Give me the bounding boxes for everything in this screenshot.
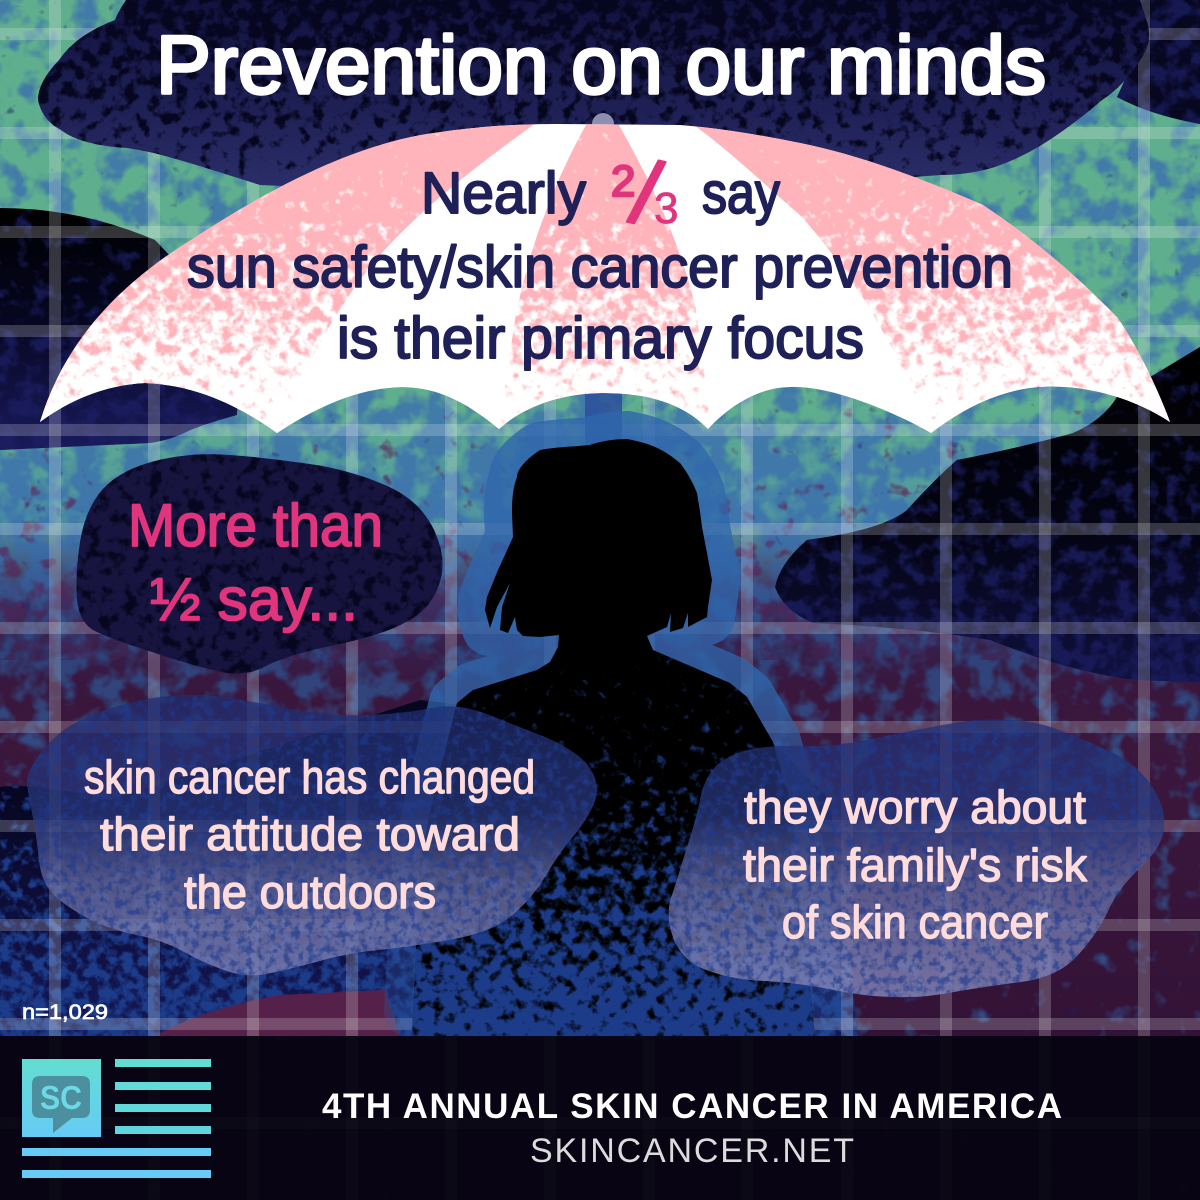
text block: attitude: skin cancer has changed xyxy=(84,751,535,803)
text block: umbrella headline xyxy=(187,161,1013,371)
text block: family worry xyxy=(743,781,1088,948)
icon: umbrella tip xyxy=(592,113,614,135)
text block: umbrella headline: Nearly xyxy=(421,161,586,226)
callout: two-thirds fraction xyxy=(611,142,678,245)
text block: umbrella headline: sun safety/skin cancer prevention xyxy=(187,235,1013,300)
background: dark speckled hill xyxy=(0,690,880,1040)
text block: more than half: ½ say... xyxy=(150,566,358,633)
icon: umbrella pole xyxy=(585,385,622,455)
panel: family worry cloud xyxy=(660,710,1175,1005)
panel: umbrella canopy xyxy=(40,124,1170,433)
panel: more than half cloud xyxy=(76,454,442,674)
text block: more than half: More than xyxy=(128,492,383,559)
icon: person silhouette xyxy=(400,439,830,1040)
footer website: SKINCANCER.NET xyxy=(530,1132,854,1170)
panel: attitude cloud xyxy=(20,690,610,985)
text block: attitude xyxy=(84,751,535,918)
text block: family worry: of skin cancer xyxy=(782,896,1048,948)
text block: family worry: they worry about xyxy=(744,781,1086,833)
panel: title cloud xyxy=(38,0,1149,186)
sample size note: n=1,029 xyxy=(22,1001,108,1024)
text block: more than half xyxy=(128,492,383,633)
icon: person silhouette glow xyxy=(412,439,815,1010)
text block: umbrella headline: say xyxy=(702,161,780,226)
background: dark cloud top right corner xyxy=(1117,0,1200,124)
background: dark cloud left xyxy=(0,208,238,450)
text block: family worry: their family's risk xyxy=(743,839,1088,891)
footer heading: 4TH ANNUAL SKIN CANCER IN AMERICA xyxy=(322,1087,1062,1126)
background: dark cloud right xyxy=(760,340,1200,690)
text block: attitude: their attitude toward xyxy=(100,808,520,860)
callout: two-thirds fraction: 2 xyxy=(611,157,635,206)
callout: two-thirds fraction: / xyxy=(623,142,668,245)
callout: two-thirds fraction: 3 xyxy=(654,184,678,233)
panel: footer band xyxy=(0,1036,1200,1200)
title: Prevention on our minds xyxy=(156,20,1046,111)
icon: SkinCancer.net flag logo: SC xyxy=(40,1079,82,1116)
icon: SkinCancer.net flag logo xyxy=(22,1059,211,1178)
text block: umbrella headline: is their primary focus xyxy=(337,306,864,371)
text block: attitude: the outdoors xyxy=(184,866,436,918)
